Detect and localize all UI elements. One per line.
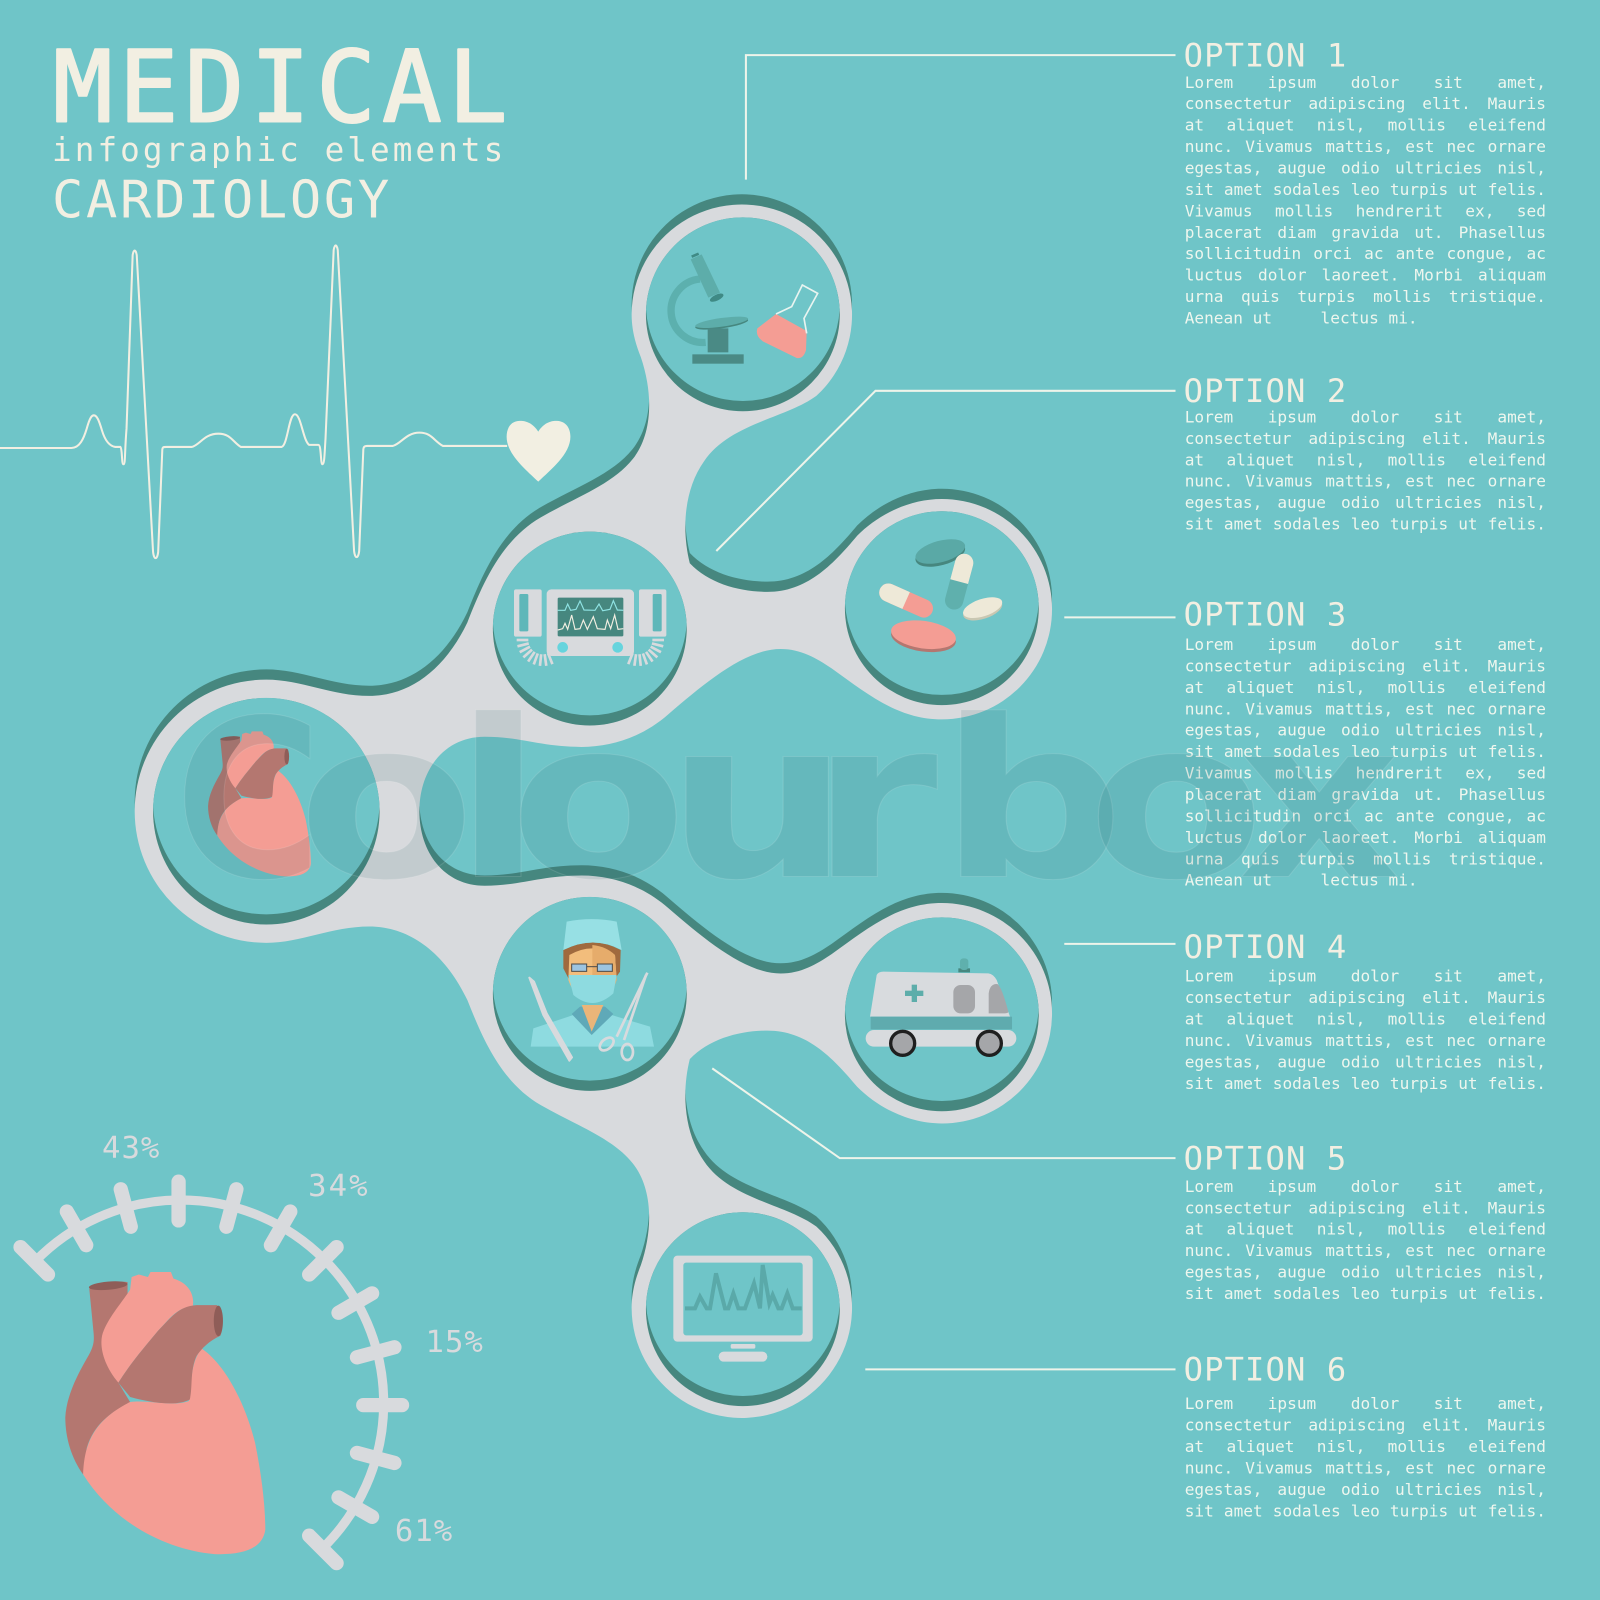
connector lines: [712, 55, 1176, 1369]
text block: option 3: sit amet sodales leo turpis ut felis.: [1185, 742, 1546, 761]
text block: option 3: at aliquet nisl, mollis eleifend: [1185, 678, 1546, 697]
text block: option 6: sit amet sodales leo turpis ut felis.: [1185, 1501, 1546, 1520]
text block: option 3: [1185, 635, 1546, 890]
icon: monitor: [673, 1256, 813, 1362]
icon: pills: [876, 535, 1005, 656]
text block: option 1: egestas, augue odio ultricies nisl,: [1185, 158, 1546, 178]
watermark: Colourbox: x: [1238, 673, 1401, 928]
text block: option 3: egestas, augue odio ultricies nisl,: [1185, 720, 1546, 740]
gauge label 15%: 15%: [426, 1325, 484, 1360]
heading: option 2: OPTION 2: [1184, 372, 1347, 410]
gauge arc with ticks: [21, 1182, 402, 1563]
subtitle: infographic elements: infographic elements: [52, 131, 506, 169]
text block: option 4: at aliquet nisl, mollis eleifend: [1185, 1009, 1546, 1029]
text block: option 6: nunc. Vivamus mattis, est nec ornare: [1185, 1458, 1546, 1478]
text block: option 2: Lorem ipsum dolor sit amet,: [1185, 407, 1546, 427]
text block: option 3: Vivamus mollis hendrerit ex, sed: [1185, 763, 1546, 783]
text block: option 1: nunc. Vivamus mattis, est nec ornare: [1185, 137, 1546, 156]
text block: option 5: [1185, 1177, 1546, 1303]
text block: option 1: sollicitudin orci ac ante congue, ac: [1185, 244, 1546, 263]
text block: option 4: [1185, 966, 1546, 1093]
text block: option 6: egestas, augue odio ultricies nisl,: [1185, 1480, 1546, 1499]
text block: option 2: consectetur adipiscing elit. Mauris: [1185, 429, 1546, 448]
text block: option 1: sit amet sodales leo turpis ut felis.: [1185, 180, 1546, 199]
heading: option 1: OPTION 1: [1184, 36, 1347, 74]
subtitle: CARDIOLOGY: CARDIOLOGY: [52, 170, 392, 230]
text block: option 4: egestas, augue odio ultricies nisl,: [1185, 1052, 1546, 1071]
text block: option 4: Lorem ipsum dolor sit amet,: [1185, 966, 1546, 986]
icon: defibrillator: [514, 589, 666, 666]
gauge label 34%: 34%: [308, 1169, 370, 1204]
ECG heartbeat line: [0, 245, 507, 558]
text block: option 1: consectetur adipiscing elit. Mauris: [1185, 94, 1546, 113]
text block: option 2: at aliquet nisl, mollis eleifend: [1185, 450, 1546, 469]
text block: option 5: nunc. Vivamus mattis, est nec ornare: [1185, 1241, 1546, 1260]
text block: option 3: Aenean ut lectus mi.: [1185, 870, 1418, 890]
text block: option 2: [1185, 407, 1546, 534]
text block: option 1: Lorem ipsum dolor sit amet,: [1185, 72, 1546, 92]
text block: option 1: Aenean ut lectus mi.: [1185, 308, 1418, 328]
watermark: Colourbox: C: [175, 673, 323, 929]
text block: option 1: urna quis turpis mollis tristique.: [1185, 287, 1546, 306]
text block: option 3: sollicitudin orci ac ante congue, ac: [1185, 806, 1546, 826]
text block: option 4: sit amet sodales leo turpis ut felis.: [1185, 1073, 1546, 1093]
icon: microscope and flask: [671, 254, 818, 364]
icon: large heart: [65, 1272, 265, 1554]
text block: option 5: egestas, augue odio ultricies nisl,: [1185, 1262, 1546, 1282]
text block: option 1: [1185, 72, 1546, 328]
icon: surgeon: [529, 919, 654, 1061]
text block: option 6: consectetur adipiscing elit. Mauris: [1185, 1415, 1546, 1435]
text block: option 4: nunc. Vivamus mattis, est nec ornare: [1185, 1031, 1546, 1050]
text block: option 6: at aliquet nisl, mollis eleifend: [1185, 1437, 1546, 1456]
icon: ambulance: [866, 958, 1016, 1055]
branching diagram body: [135, 194, 1052, 1418]
gauge label 43%: 43%: [102, 1131, 160, 1166]
text block: option 6: [1185, 1394, 1546, 1520]
text block: option 5: consectetur adipiscing elit. Mauris: [1185, 1198, 1546, 1217]
text block: option 3: consectetur adipiscing elit. Mauris: [1185, 656, 1546, 676]
text block: option 3: urna quis turpis mollis tristique.: [1185, 849, 1546, 868]
watermark: Colourbox: olourbo: [297, 673, 1265, 929]
text block: option 6: Lorem ipsum dolor sit amet,: [1185, 1394, 1546, 1413]
icon: cream heart: [507, 421, 570, 482]
icon: small heart: [208, 731, 311, 876]
text block: option 5: sit amet sodales leo turpis ut felis.: [1185, 1284, 1546, 1303]
text block: option 3: nunc. Vivamus mattis, est nec ornare: [1185, 699, 1546, 718]
heading: option 5: OPTION 5: [1184, 1139, 1347, 1177]
text block: option 1: Vivamus mollis hendrerit ex, sed: [1185, 201, 1546, 220]
gauge label 61%: 61%: [395, 1514, 453, 1549]
text block: option 1: placerat diam gravida ut. Phasellus: [1185, 222, 1546, 242]
text block: option 1: luctus dolor laoreet. Morbi aliquam: [1185, 265, 1546, 285]
text block: option 3: luctus dolor laoreet. Morbi aliquam: [1185, 828, 1546, 847]
text block: option 2: sit amet sodales leo turpis ut felis.: [1185, 514, 1546, 534]
heading: option 4: OPTION 4: [1184, 928, 1347, 966]
text block: option 5: Lorem ipsum dolor sit amet,: [1185, 1177, 1546, 1196]
title: MEDICAL: MEDICAL: [53, 30, 514, 145]
text block: option 2: nunc. Vivamus mattis, est nec ornare: [1185, 471, 1546, 491]
heading: option 3: OPTION 3: [1184, 596, 1347, 634]
text block: option 3: Lorem ipsum dolor sit amet,: [1185, 635, 1546, 654]
text block: option 3: placerat diam gravida ut. Phasellus: [1185, 785, 1546, 804]
text block: option 2: egestas, augue odio ultricies nisl,: [1185, 493, 1546, 512]
text block: option 4: consectetur adipiscing elit. Mauris: [1185, 988, 1546, 1007]
text block: option 5: at aliquet nisl, mollis eleifend: [1185, 1219, 1546, 1239]
text block: option 1: at aliquet nisl, mollis eleifend: [1185, 115, 1546, 135]
heading: option 6: OPTION 6: [1184, 1351, 1347, 1389]
